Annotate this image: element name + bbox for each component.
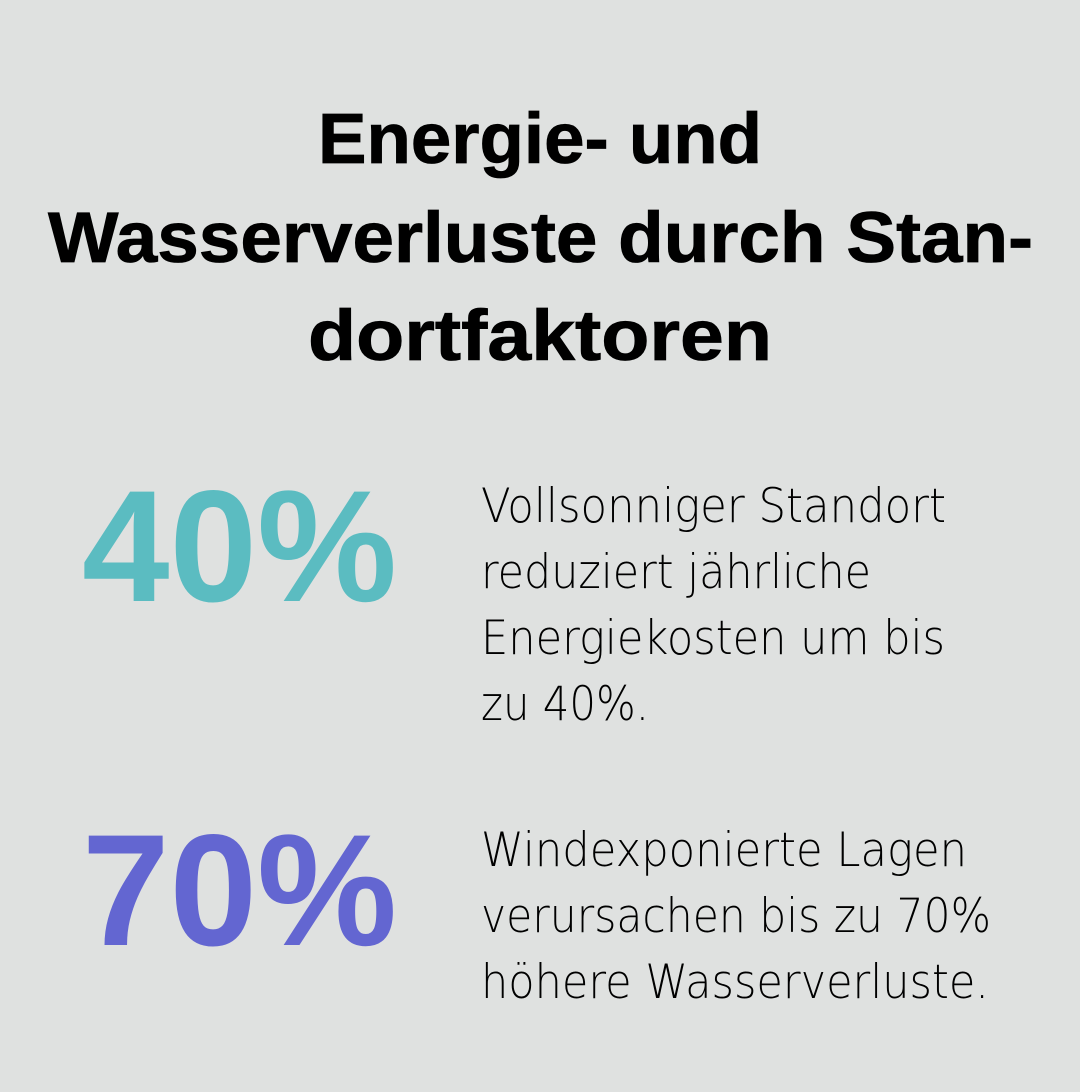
text block: 40% description: reduziert jährliche <box>481 545 871 600</box>
statistic: 40%: 40% <box>82 457 397 635</box>
title: Wasserverluste durch Stan- <box>48 199 1033 278</box>
text block: 70% description: verursachen bis zu 70% <box>481 889 991 944</box>
text block: 70% description <box>481 823 991 1010</box>
text block: 70% description: höhere Wasserverluste. <box>481 955 989 1010</box>
text block: 40% description <box>481 479 946 732</box>
text block: 40% description: Vollsonniger Standort <box>481 479 946 534</box>
title <box>48 100 1033 376</box>
statistic: 70%: 70% <box>82 801 397 979</box>
text block: 40% description: zu 40%. <box>481 677 649 732</box>
text block: 70% description: Windexponierte Lagen <box>481 823 967 878</box>
text block: 40% description: Energiekosten um bis <box>481 611 945 666</box>
title: dortfaktoren <box>308 297 772 376</box>
title: Energie- und <box>318 100 762 179</box>
